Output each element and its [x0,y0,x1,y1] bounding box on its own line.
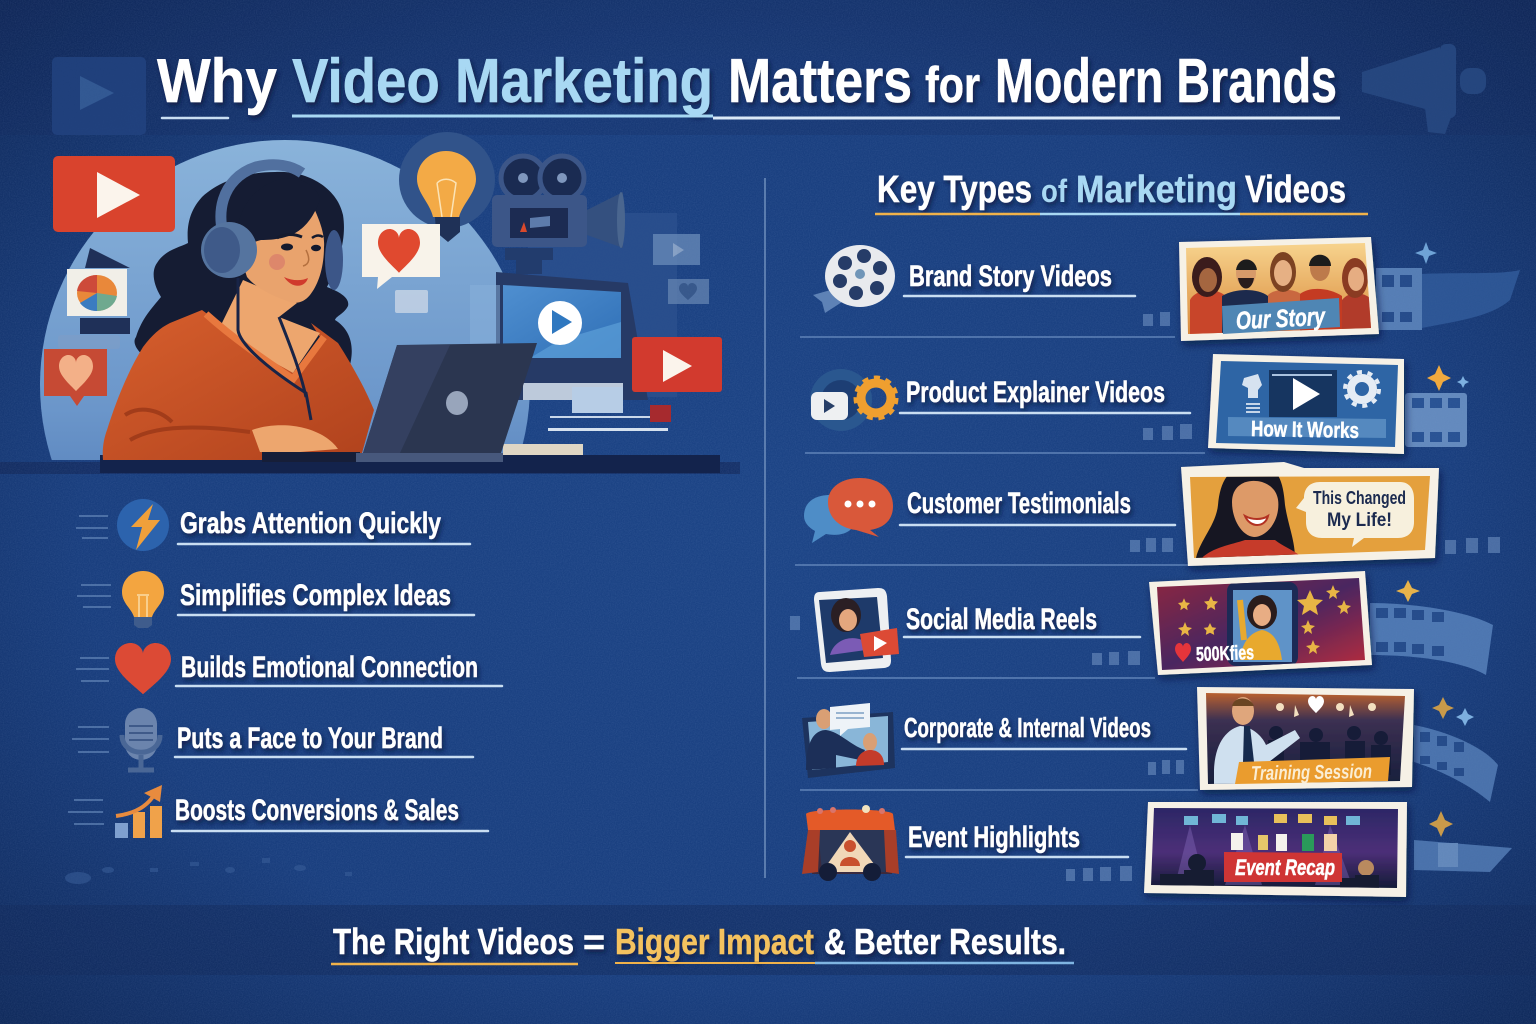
vertical divider [764,178,766,878]
icon: phone with play [814,588,899,672]
faded video icon, title left [52,57,146,135]
thumbnail: this changed my life: This Changed [1313,488,1406,508]
front hair [236,178,320,255]
thumbnail: this changed my life [1181,462,1439,566]
filmstrips [1370,268,1520,872]
speech bubble with heart [362,224,440,289]
red play tile right [632,337,722,392]
row: social media reels [814,571,1372,675]
thumbnail: our story [1179,237,1379,341]
heading: key types: Videos [1245,169,1346,211]
row: product explainer [810,354,1404,454]
film strip 1 [1376,268,1520,330]
item: simplifies [77,571,474,628]
illustration: woman with laptop and video icons [40,132,722,473]
title: for [925,57,980,113]
icon: chat bubbles [804,478,893,543]
label: Product Explainer Videos [906,376,1165,409]
film strip 6 [1414,840,1512,872]
title: Matters [728,47,912,116]
red play tile left [53,156,175,232]
row separators [795,337,1205,790]
hand [252,425,338,452]
pie chart card [67,269,127,316]
thumbnail: event recap: Event Recap [1235,855,1335,880]
icon: stage [802,805,899,881]
heading: key types: Marketing [1076,169,1237,211]
scattered decor bottom left [65,858,352,884]
table [100,455,720,473]
heading: key types [875,169,1368,214]
label: Simplifies Complex Ideas [180,579,451,612]
heading: key types: of [1041,173,1067,209]
row: event highlights [802,802,1407,897]
light bulb [399,132,495,242]
small note [395,290,428,313]
thumbnail: our story: Our Story [1235,303,1326,335]
title underline [162,116,1340,118]
item: grabs attention [76,499,470,551]
icon: microphone [72,708,160,770]
thumbnail: training session: Training Session [1251,761,1372,785]
row: corporate [802,687,1414,790]
title: Why [157,47,277,116]
neck and chest [220,280,320,373]
icon: presenter on screen [802,703,895,778]
icon: film reel [813,245,895,313]
bottom tagline: & Better Results. [824,921,1066,962]
thumbnail: event recap [1144,802,1407,897]
label: Corporate & Internal Videos [904,712,1151,743]
film camera [492,156,625,274]
light panels and lines under the monitor [470,285,671,455]
thumbnail: how it works: How It Works [1251,416,1359,443]
film strip 4 [1370,603,1493,675]
background circle [40,140,530,460]
film strip 5 [1414,725,1498,802]
bottom tagline: The Right Videos [333,921,574,962]
row: testimonials [804,462,1439,566]
pale strip [58,335,120,349]
bottom tagline: Bigger Impact [615,921,814,962]
label: Social Media Reels [906,603,1097,636]
heading: key types: Key Types [877,169,1032,211]
thumbnail: this changed my life: My Life! [1327,510,1392,531]
bottom tagline [331,921,1074,964]
row: brand story [813,237,1379,341]
label: Boosts Conversions & Sales [175,794,459,827]
collar band [206,314,324,379]
bottom tagline: = [583,921,605,962]
icon: bulb [77,571,164,628]
laptop [262,343,537,462]
face [242,202,324,303]
item: conversions [68,785,488,838]
title [157,47,1337,116]
sweater [103,310,374,460]
thumbnail: reels [1149,571,1372,675]
title: Modern Brands [995,47,1337,116]
headphones [201,165,343,290]
label: Builds Emotional Connection [181,651,478,684]
headphone cord [238,278,311,420]
dark clapper behind card [85,248,130,268]
label: Customer Testimonials [907,487,1131,520]
back hair [135,172,352,386]
item: face [72,708,473,770]
thumbnail: how it works [1208,354,1404,454]
icon: lightning [76,499,169,551]
label: Grabs Attention Quickly [180,507,441,540]
label: Brand Story Videos [909,260,1112,293]
film tile under card [80,318,130,334]
thumbnail: reels: 500Kfies [1196,642,1254,666]
small square dashes [790,312,1500,881]
icon: heart [76,643,171,694]
sparkles [1396,242,1474,837]
item: emotional [76,643,502,694]
title: Video Marketing [292,47,713,116]
film strip 2 [1405,393,1467,447]
faded side tiles [653,234,709,304]
faded megaphone, title right [1362,44,1486,134]
list: benefits [68,499,502,838]
monitor with play button [496,272,648,400]
label: Puts a Face to Your Brand [177,722,443,755]
label: Event Highlights [908,821,1080,854]
heart tag [44,349,107,406]
thumbnail: training session [1197,687,1414,790]
facial features [269,234,323,286]
dark media panel [528,213,677,397]
icon: bar chart with arrow [68,785,162,838]
icon: video and gear [810,369,896,431]
sleeve cuff shading [125,410,250,440]
